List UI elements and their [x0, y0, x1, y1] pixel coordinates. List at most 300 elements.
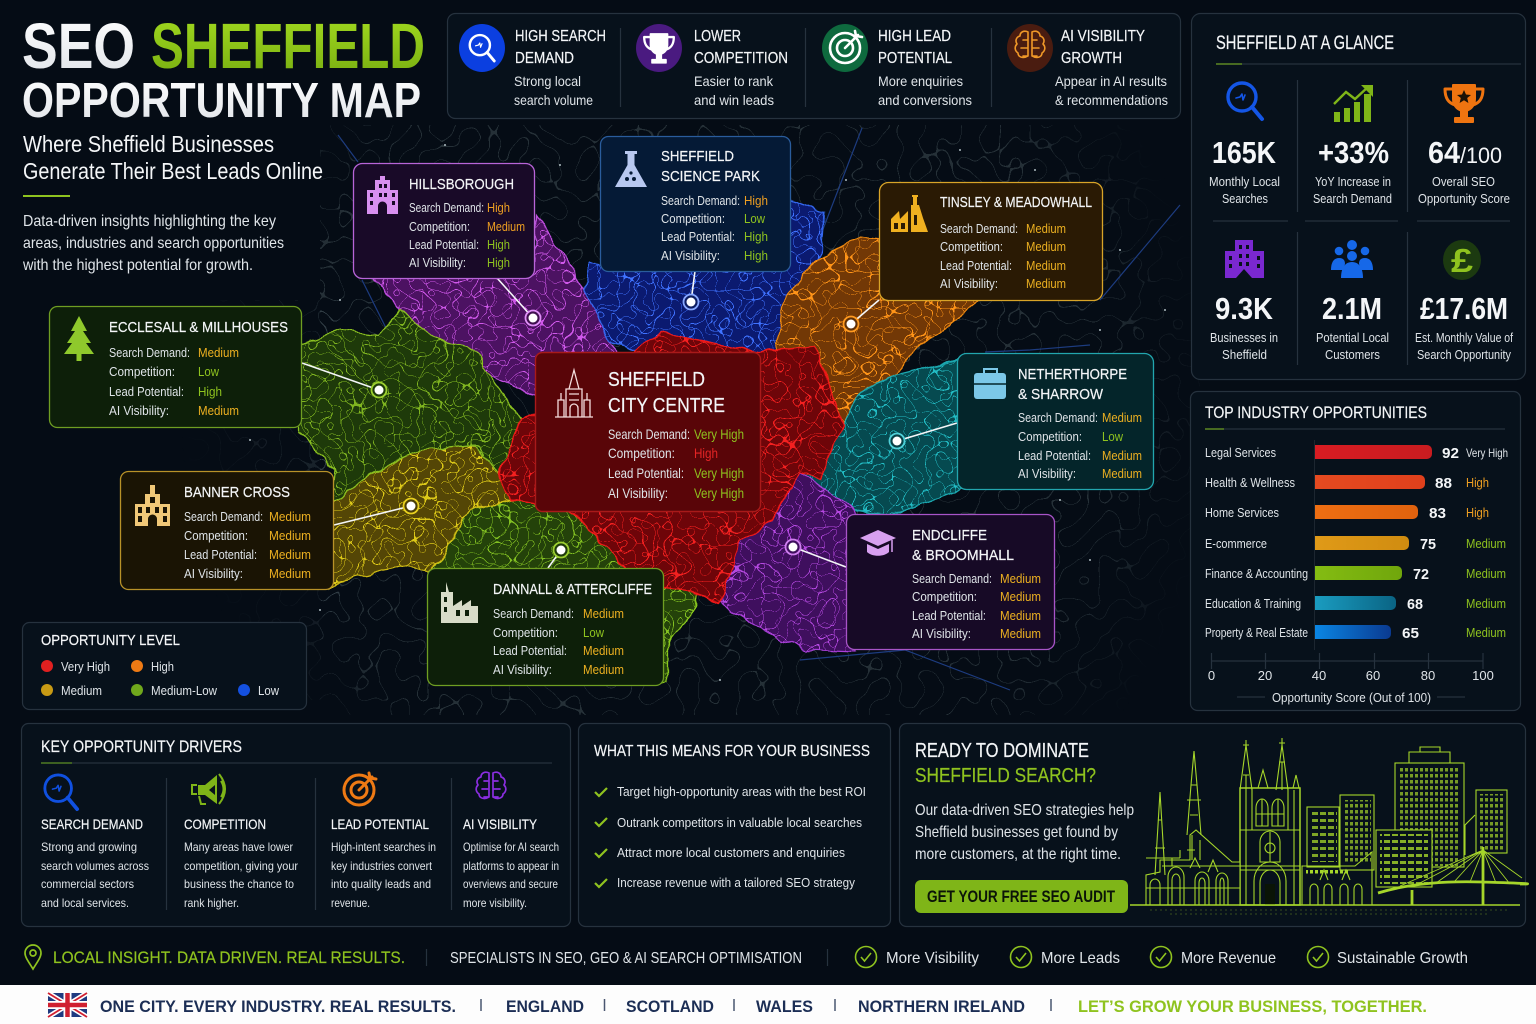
- metrics: Medium: [1000, 626, 1041, 641]
- benefit: lower competition: [636, 24, 788, 108]
- metrics: Lead Potential:: [940, 258, 1012, 273]
- metrics: Lead Potential:: [409, 237, 479, 252]
- benefit: high lead potential: and conversions: [878, 92, 972, 108]
- bar: home services: Home Services: [1205, 505, 1279, 520]
- metrics: Competition:: [493, 625, 558, 640]
- icon: Hillsborough building: [367, 176, 398, 214]
- metrics: Competition:: [912, 589, 977, 604]
- bar: education and training: 68: [1407, 596, 1423, 613]
- tagline strip: LOCAL INSIGHT. DATA DRIVEN. REAL RESULTS.: [53, 948, 405, 967]
- metrics: [109, 345, 239, 418]
- footer band: ENGLAND: [506, 997, 584, 1016]
- metrics: AI Visibility:: [661, 248, 720, 263]
- metrics: AI Visibility:: [1018, 466, 1076, 481]
- metrics: High: [694, 445, 718, 461]
- metrics: Medium: [1026, 221, 1066, 236]
- driver: lead potential: High-intent searches in: [331, 840, 436, 854]
- metrics: Medium: [1000, 608, 1041, 623]
- bar: finance and accounting: Finance & Accounting: [1205, 566, 1308, 581]
- metrics: Low: [744, 211, 766, 226]
- subtitle: [23, 131, 323, 184]
- icon: factory: [891, 195, 928, 232]
- benefit: high search demand: DEMAND: [515, 50, 574, 67]
- driver: competition: business the chance to: [184, 877, 294, 891]
- benefit: sustainable growth: Sustainable Growth: [1337, 950, 1468, 967]
- benefit: more leads: [1010, 946, 1120, 968]
- intro text: Data-driven insights highlighting the key: [23, 213, 276, 230]
- heading: BANNER CROSS: [184, 484, 290, 501]
- metrics: Search Demand:: [608, 426, 690, 442]
- metrics: Lead Potential:: [661, 229, 735, 244]
- benefit: high lead potential: POTENTIAL: [878, 50, 952, 67]
- metrics: High: [198, 384, 222, 399]
- stat: monthly searches: Monthly Local: [1209, 174, 1280, 189]
- metrics: Medium: [1026, 276, 1066, 291]
- driver: AI visibility: [463, 772, 559, 910]
- heading: SHEFFIELD: [608, 369, 705, 391]
- icon: search: [1228, 83, 1262, 119]
- bar: education and training: Education & Training: [1205, 596, 1301, 611]
- metrics: Search Demand:: [109, 345, 190, 360]
- icon: science flask: [615, 151, 647, 187]
- chart axis: 0: [1208, 668, 1215, 683]
- metrics: Competition:: [1018, 429, 1082, 444]
- chart axis: [1208, 653, 1494, 705]
- metrics: Search Demand:: [912, 571, 992, 586]
- region: Hillsborough: [370, 215, 625, 402]
- bar: finance and accounting: 72: [1413, 566, 1429, 583]
- icon: search: [45, 775, 77, 809]
- region: Endcliffe and Broomhall: [700, 472, 855, 652]
- bar: legal services: Legal Services: [1205, 445, 1276, 460]
- checklist: Outrank competitors in valuable local searches: [617, 815, 862, 830]
- icon: purple trophy: [636, 24, 682, 72]
- text block: Sheffield businesses get found by: [915, 824, 1118, 841]
- metrics: Medium: [198, 345, 239, 360]
- metrics: Search Demand:: [1018, 410, 1098, 425]
- intro text: with the highest potential for growth.: [22, 257, 253, 274]
- stat: monthly searches: [1209, 83, 1280, 206]
- benefit: high search demand: HIGH SEARCH: [515, 28, 606, 45]
- map pins and connector lines: [302, 271, 957, 568]
- bar: e-commerce: [1205, 536, 1506, 553]
- heading: TINSLEY & MEADOWHALL: [940, 194, 1092, 211]
- legend: opportunity level: Very High: [61, 659, 110, 674]
- benefit: more visibility: [856, 946, 979, 968]
- region: Ecclesall and Millhouses: [298, 310, 520, 505]
- stat: opportunity score: Opportunity Score: [1418, 191, 1510, 206]
- metrics: Lead Potential:: [608, 465, 684, 481]
- icon: tree: [64, 316, 94, 361]
- metrics: Medium: [1026, 258, 1066, 273]
- metrics: Lead Potential:: [109, 384, 184, 399]
- metrics: [409, 200, 525, 270]
- stat: businesses: 9.3K: [1215, 291, 1274, 326]
- bar chart: [1205, 440, 1508, 650]
- stat: YoY increase: +33%: [1318, 135, 1389, 170]
- metrics: Competition:: [608, 445, 675, 461]
- tagline strip: SPECIALISTS IN SEO, GEO & AI SEARCH OPTIMISATION: [450, 950, 802, 967]
- heading: KEY OPPORTUNITY DRIVERS: [41, 737, 242, 756]
- metrics: Very High: [694, 485, 744, 501]
- chart axis: 80: [1421, 668, 1435, 683]
- metrics: Medium: [1102, 448, 1142, 463]
- benefit: more revenue: [1150, 946, 1276, 968]
- bar: property and real estate: Medium: [1466, 625, 1506, 640]
- stat: YoY increase: [1313, 85, 1392, 206]
- button: [915, 880, 1128, 913]
- metrics: Low: [198, 364, 220, 379]
- subtitle: Where Sheffield Businesses: [23, 131, 274, 157]
- panel: what this means: [578, 724, 890, 926]
- heading: WHAT THIS MEANS FOR YOUR BUSINESS: [594, 743, 870, 760]
- heading: & SHARROW: [1018, 386, 1104, 403]
- icon: people: [1331, 240, 1373, 278]
- footer band: [0, 985, 1536, 1024]
- driver: search demand: Strong and growing: [41, 840, 137, 854]
- checklist: [595, 784, 866, 890]
- driver: competition: COMPETITION: [184, 816, 266, 832]
- bar: e-commerce: 75: [1420, 536, 1436, 553]
- region: Netherthorpe and Sharrow: [800, 358, 965, 516]
- metrics: Medium: [1000, 589, 1041, 604]
- icon: UK flag: [48, 993, 87, 1017]
- icon: green target: [822, 24, 868, 72]
- metrics: High: [487, 255, 510, 270]
- footer band: WALES: [756, 997, 813, 1016]
- heading: CITY CENTRE: [608, 395, 725, 417]
- callout: Sheffield Science Park: [600, 136, 790, 272]
- metrics: Search Demand:: [409, 200, 484, 215]
- stat: opportunity score: Overall SEO: [1432, 174, 1495, 189]
- driver: competition: rank higher.: [184, 896, 239, 910]
- benefit: AI visibility growth: AI VISIBILITY: [1061, 28, 1145, 45]
- bar: health and wellness: [1205, 475, 1489, 492]
- driver: search demand: and local services.: [41, 896, 129, 910]
- bar: finance and accounting: [1205, 566, 1506, 583]
- metrics: Search Demand:: [184, 509, 263, 524]
- stat: monthly value: £17.6M: [1420, 291, 1508, 326]
- metrics: AI Visibility:: [608, 485, 668, 501]
- legend: opportunity level: High: [151, 659, 174, 674]
- metrics: AI Visibility:: [493, 662, 552, 677]
- driver: AI visibility: more visibility.: [463, 896, 527, 910]
- heading: [661, 148, 760, 185]
- benefit: high lead potential: More enquiries: [878, 73, 963, 89]
- metrics: Medium: [1102, 410, 1142, 425]
- callout: Tinsley and Meadowhall: [880, 182, 1102, 300]
- heading: [915, 740, 1096, 787]
- bar: home services: [1205, 505, 1489, 522]
- stat: monthly searches: 165K: [1212, 135, 1277, 170]
- icon: graduation cap: [860, 530, 896, 556]
- bar: e-commerce: Medium: [1466, 536, 1506, 551]
- footer band: NORTHERN IRELAND: [858, 997, 1025, 1016]
- text block: Our data-driven SEO strategies help: [915, 802, 1134, 819]
- metrics: Low: [583, 625, 605, 640]
- stat: potential customers: [1316, 240, 1389, 362]
- intro text: [22, 213, 284, 274]
- bar: finance and accounting: Medium: [1466, 566, 1506, 581]
- icon: growth chart: [1334, 85, 1373, 122]
- benefit: lower competition: COMPETITION: [694, 50, 788, 67]
- heading: [912, 527, 1014, 564]
- driver: search demand: search volumes across: [41, 859, 149, 873]
- callout: Banner Cross: [120, 472, 334, 590]
- title: OPPORTUNITY MAP: [22, 74, 421, 128]
- benefit: more revenue: More Revenue: [1181, 950, 1276, 967]
- metrics: [493, 606, 624, 677]
- metrics: High: [744, 193, 768, 208]
- metrics: Competition:: [940, 239, 1003, 254]
- stat: YoY increase: YoY Increase in: [1315, 174, 1391, 189]
- stat: potential customers: Customers: [1325, 347, 1380, 362]
- metrics: Lead Potential:: [912, 608, 986, 623]
- driver: AI visibility: overviews and secure: [463, 877, 558, 891]
- stat: opportunity score: [1418, 85, 1510, 206]
- benefit: AI visibility growth: Appear in AI results: [1055, 73, 1167, 89]
- benefit: AI visibility growth: & recommendations: [1055, 92, 1168, 108]
- legend: opportunity level: Low: [258, 683, 280, 698]
- icon: brain: [476, 772, 506, 798]
- benefit: high lead potential: [822, 24, 972, 108]
- bar: property and real estate: Property & Real Estate: [1205, 625, 1308, 640]
- metrics: Competition:: [661, 211, 725, 226]
- metrics: [608, 426, 744, 501]
- driver: search demand: SEARCH DEMAND: [41, 816, 143, 832]
- callout: Sheffield City Centre: [536, 352, 760, 512]
- icon: location pin: [25, 945, 41, 969]
- heading: DANNALL & ATTERCLIFFE: [493, 581, 652, 598]
- bar: legal services: 92: [1442, 445, 1459, 462]
- callout: Dannall and Attercliffe: [428, 568, 664, 686]
- legend: opportunity level: OPPORTUNITY LEVEL: [41, 632, 180, 649]
- footer band: ONE CITY. EVERY INDUSTRY. REAL RESULTS.: [100, 997, 456, 1016]
- heading: HILLSBOROUGH: [409, 176, 514, 193]
- chart axis: 100: [1472, 668, 1494, 683]
- bar: property and real estate: [1205, 625, 1506, 642]
- subtitle: Generate Their Best Leads Online: [23, 158, 323, 184]
- heading: TOP INDUSTRY OPPORTUNITIES: [1205, 403, 1427, 422]
- panel: call to action: [900, 724, 1528, 926]
- chart axis: 20: [1258, 668, 1272, 683]
- metrics: AI Visibility:: [409, 255, 466, 270]
- checklist: Attract more local customers and enquiries: [617, 845, 845, 860]
- heading: ENDCLIFFE: [912, 527, 987, 544]
- illustration: Sheffield skyline: [1130, 738, 1528, 914]
- metrics: Competition:: [184, 528, 248, 543]
- bar: home services: High: [1466, 505, 1489, 520]
- icon: Banner Cross building: [135, 485, 170, 526]
- text block: more customers, at the right time.: [915, 846, 1121, 863]
- stat: potential customers: Potential Local: [1316, 330, 1389, 345]
- chart axis: 40: [1312, 668, 1326, 683]
- metrics: Very High: [694, 465, 744, 481]
- benefit: AI visibility growth: [1007, 24, 1168, 108]
- bar: health and wellness: Health & Wellness: [1205, 475, 1295, 490]
- benefit: more leads: More Leads: [1041, 950, 1120, 967]
- intro text: areas, industries and search opportunities: [23, 235, 284, 252]
- region: Sheffield City Centre: [499, 333, 843, 604]
- metrics: High: [487, 237, 510, 252]
- checklist: Target high-opportunity areas with the best ROI: [617, 784, 866, 799]
- stat: businesses: Sheffield: [1222, 347, 1267, 362]
- stat: potential customers: 2.1M: [1322, 291, 1382, 326]
- metrics: [1018, 410, 1142, 481]
- benefit: AI visibility growth: GROWTH: [1061, 50, 1122, 67]
- metrics: AI Visibility:: [109, 403, 169, 418]
- title: [22, 10, 425, 128]
- metrics: Search Demand:: [661, 193, 740, 208]
- icon: trophy: [1445, 85, 1483, 122]
- metrics: Very High: [694, 426, 744, 442]
- metrics: AI Visibility:: [912, 626, 971, 641]
- driver: competition: [184, 774, 298, 910]
- icon: pound: £: [1451, 242, 1474, 279]
- heading: SHEFFIELD: [661, 148, 734, 165]
- chart axis: 60: [1366, 668, 1380, 683]
- legend: opportunity level: Medium: [61, 683, 102, 698]
- stat: businesses: Businesses in: [1210, 330, 1278, 345]
- bar: legal services: [1205, 445, 1508, 462]
- metrics: High: [744, 248, 768, 263]
- driver: AI visibility: Optimise for AI search: [463, 840, 559, 854]
- metrics: Medium: [487, 219, 525, 234]
- metrics: [184, 509, 311, 581]
- benefit: high search demand: search volume: [514, 92, 593, 108]
- metrics: [661, 193, 768, 263]
- title: SEO: [22, 10, 135, 82]
- heading: SHEFFIELD SEARCH?: [915, 765, 1096, 787]
- bar: home services: 83: [1429, 505, 1446, 522]
- heading: READY TO DOMINATE: [915, 740, 1089, 762]
- metrics: Lead Potential:: [493, 643, 567, 658]
- benefit: lower competition: Easier to rank: [694, 73, 774, 89]
- metrics: Competition:: [109, 364, 175, 379]
- driver: lead potential: [331, 773, 436, 910]
- region: Tinsley and Meadowhall: [777, 237, 985, 425]
- benefit: high search demand: [459, 24, 606, 108]
- metrics: [912, 571, 1041, 641]
- callout: Endcliffe and Broomhall: [846, 514, 1054, 650]
- bar: health and wellness: High: [1466, 475, 1489, 490]
- metrics: Medium: [583, 643, 624, 658]
- heading: [608, 369, 725, 417]
- driver: search demand: [41, 775, 149, 910]
- metrics: Low: [1102, 429, 1124, 444]
- metrics: Medium: [269, 509, 311, 524]
- metrics: High: [487, 200, 510, 215]
- panel: key opportunity drivers: [22, 724, 570, 926]
- heading: [1018, 366, 1127, 403]
- heading: SHEFFIELD AT A GLANCE: [1216, 33, 1394, 54]
- callout: Ecclesall and Millhouses: [50, 306, 302, 428]
- driver: lead potential: LEAD POTENTIAL: [331, 816, 429, 832]
- icon: megaphone: [192, 774, 225, 804]
- stat: opportunity score: 64: [1428, 135, 1461, 170]
- metrics: Search Demand:: [940, 221, 1018, 236]
- icon: target: [344, 773, 376, 805]
- region: Banner Cross: [330, 445, 510, 590]
- metrics: AI Visibility:: [940, 276, 998, 291]
- metrics: [940, 221, 1066, 291]
- region: Sheffield Science Park: [585, 200, 824, 352]
- footer band: SCOTLAND: [626, 997, 714, 1016]
- stat: monthly value: [1415, 240, 1513, 362]
- opportunity map: [10, 125, 1200, 715]
- metrics: Medium: [583, 606, 624, 621]
- metrics: AI Visibility:: [184, 566, 243, 581]
- bar: education and training: [1205, 596, 1506, 613]
- benefit: high lead potential: HIGH LEAD: [878, 28, 951, 45]
- stat: opportunity score: /100: [1460, 143, 1502, 168]
- region: Dannall and Attercliffe: [430, 500, 700, 682]
- stat: monthly value: Est. Monthly Value of: [1415, 330, 1513, 345]
- driver: competition: Many areas have lower: [184, 840, 293, 854]
- driver: AI visibility: AI VISIBILITY: [463, 816, 538, 832]
- legend: opportunity level: [22, 622, 306, 710]
- bar: property and real estate: 65: [1402, 625, 1419, 642]
- benefit: high search demand: Strong local: [514, 73, 581, 89]
- benefit: lower competition: LOWER: [694, 28, 741, 45]
- driver: lead potential: revenue.: [331, 896, 370, 910]
- legend: opportunity level: Medium-Low: [151, 683, 218, 698]
- checklist: Increase revenue with a tailored SEO strategy: [617, 875, 855, 890]
- metrics: Medium: [198, 403, 239, 418]
- text block: [915, 802, 1134, 863]
- bar: education and training: Medium: [1466, 596, 1506, 611]
- driver: lead potential: into quality leads and: [331, 877, 431, 891]
- metrics: Medium: [269, 547, 311, 562]
- bar: e-commerce: E-commerce: [1205, 536, 1267, 551]
- stat: YoY increase: Search Demand: [1313, 191, 1392, 206]
- driver: competition: competition, giving your: [184, 859, 298, 873]
- panel: benefits strip: [448, 14, 1180, 118]
- bar: legal services: Very High: [1466, 446, 1508, 460]
- benefit: more visibility: More Visibility: [886, 950, 979, 967]
- benefit: lower competition: and win leads: [694, 92, 774, 108]
- metrics: Medium: [1000, 571, 1041, 586]
- bar: health and wellness: 88: [1435, 475, 1452, 492]
- heading: ECCLESALL & MILLHOUSES: [109, 319, 288, 336]
- callout: Netherthorpe and Sharrow: [958, 354, 1154, 490]
- title: SHEFFIELD: [151, 10, 425, 82]
- footer band: LET’S GROW YOUR BUSINESS, TOGETHER.: [1078, 997, 1427, 1016]
- chart axis: Opportunity Score (Out of 100): [1272, 690, 1431, 705]
- icon: mills: [441, 582, 478, 623]
- panel: top industry opportunities: [1190, 392, 1520, 710]
- heading: SCIENCE PARK: [661, 168, 760, 185]
- driver: search demand: commercial sectors: [41, 877, 134, 891]
- stat: businesses: [1210, 240, 1278, 362]
- tagline strip: [25, 945, 1468, 969]
- heading: NETHERTHORPE: [1018, 366, 1127, 383]
- benefit: sustainable growth: [1308, 946, 1468, 968]
- metrics: Competition:: [409, 219, 470, 234]
- icon: briefcase: [974, 369, 1006, 399]
- heading: & BROOMHALL: [912, 547, 1014, 564]
- icon: town hall: [555, 370, 593, 417]
- metrics: Medium: [269, 528, 311, 543]
- metrics: Medium: [269, 566, 311, 581]
- metrics: Search Demand:: [493, 606, 574, 621]
- callout: Hillsborough: [354, 164, 534, 278]
- icon: orange brain: [1007, 24, 1053, 72]
- metrics: Lead Potential:: [184, 547, 257, 562]
- button: GET YOUR FREE SEO AUDIT: [927, 887, 1115, 906]
- stat: monthly value: Search Opportunity: [1417, 347, 1511, 362]
- metrics: Lead Potential:: [1018, 448, 1091, 463]
